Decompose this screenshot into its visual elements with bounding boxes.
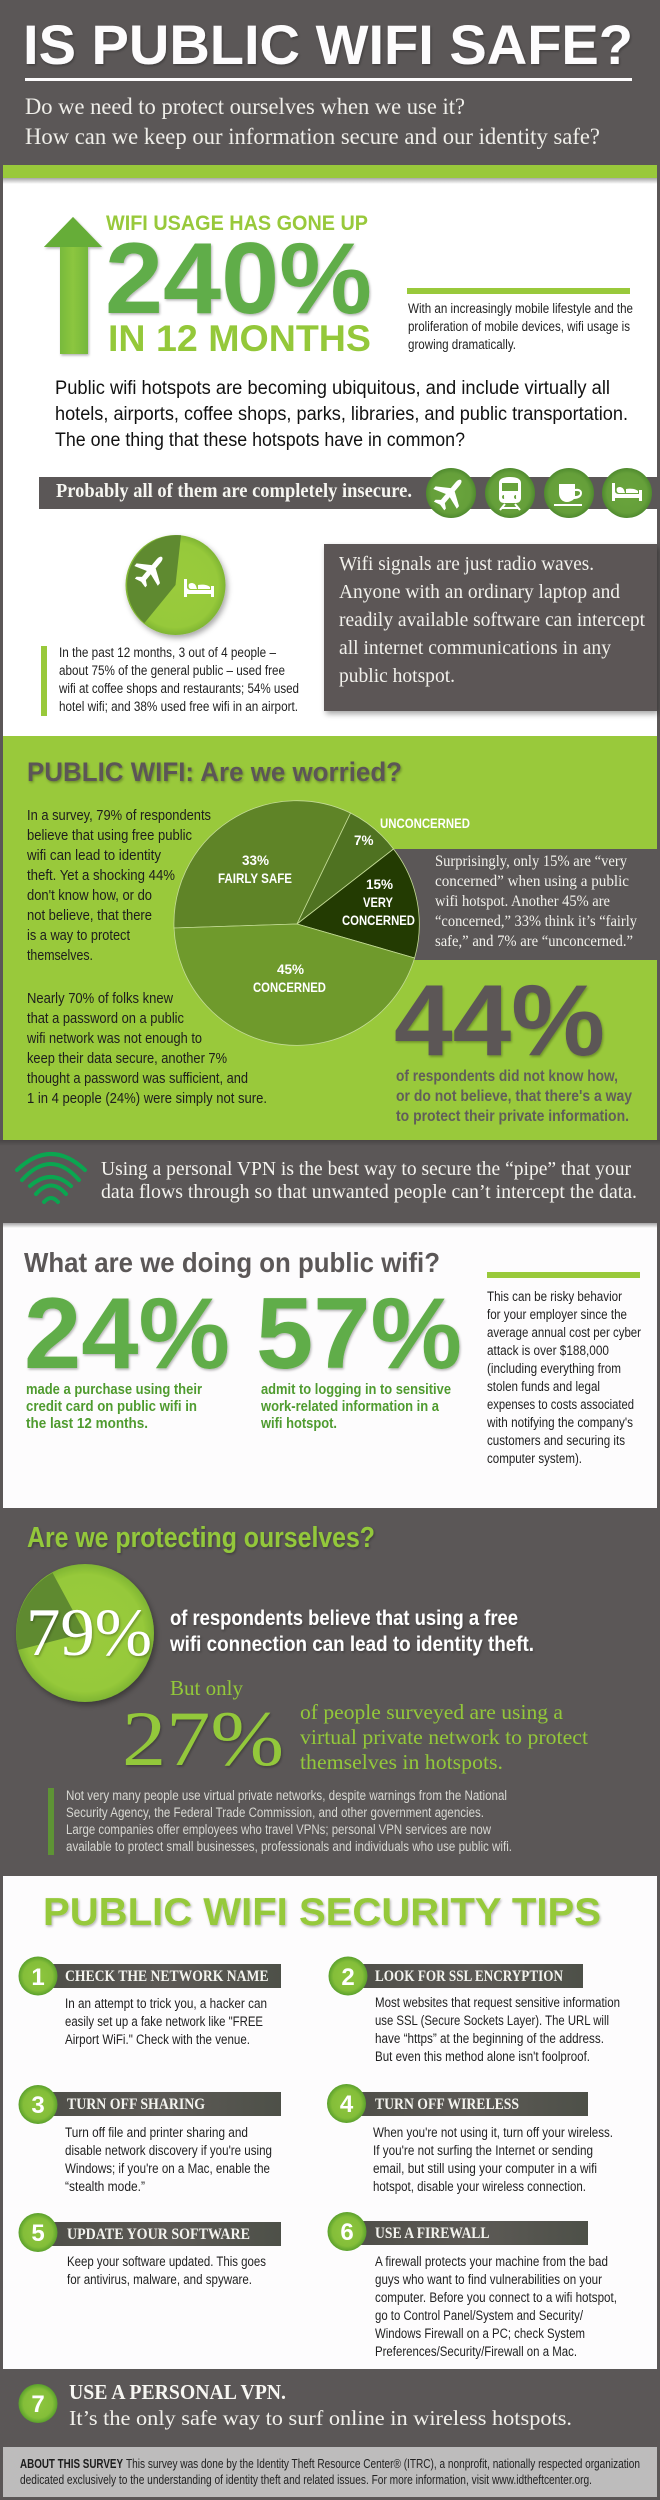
text: password paragraph: Nearly 70% of folks knew: [27, 991, 173, 1007]
text: VPN usage note: [48, 1788, 512, 1855]
tip 4: When you're not using it, turn off your wireless.: [373, 2125, 613, 2140]
text: survey paragraph: don't know how, or do: [27, 888, 152, 904]
callout: concern levels: Surprisingly, only 15% are “very: [435, 853, 627, 870]
stat: 27%: of people surveyed are using a: [300, 1700, 564, 1724]
text: survey paragraph: not believe, that there: [27, 908, 152, 924]
text: risky behavior note: (including everything from: [487, 1361, 621, 1376]
icon: wifi: [17, 1154, 85, 1202]
panel: are we worried: [3, 736, 657, 1140]
icon: bed: [602, 468, 652, 518]
text: risky behavior note: stolen funds and legal: [487, 1379, 600, 1394]
tip 2: Most websites that request sensitive information: [375, 1995, 620, 2010]
label: very concerned: VERY: [363, 895, 393, 910]
label: very concerned: CONCERNED: [342, 913, 415, 928]
text: risky behavior note: expenses to costs associated: [487, 1397, 634, 1412]
tip 3: 3: [31, 2092, 45, 2119]
text: password paragraph: [26, 991, 267, 1107]
tip 2: LOOK FOR SSL ENCRYPTION: [375, 1968, 563, 1985]
text: usage stats: about 75% of the general public – used free: [59, 663, 285, 678]
text: growth note: [407, 288, 633, 352]
callout: concern levels: concerned” when using a public: [435, 873, 629, 890]
text: identity theft belief: [169, 1606, 534, 1656]
text: risky behavior note: This can be risky behavior: [487, 1289, 622, 1304]
text: growth note: growing dramatically.: [408, 337, 516, 352]
tip 2: use SSL (Secure Sockets Layer). The URL will: [375, 2013, 609, 2028]
tip 2: 2: [341, 1964, 355, 1991]
tip 3: Turn off file and printer sharing and: [65, 2125, 248, 2140]
callout: concern levels: “concerned,” 33% think it’s “fairly: [435, 913, 637, 930]
text: use a personal VPN: USE A PERSONAL VPN.: [69, 2380, 286, 2404]
text: hotspots paragraph: hotels, airports, coffee shops, parks, libraries, and public transportation.: [55, 404, 628, 425]
callout: radio waves: public hotspot.: [339, 665, 455, 687]
heading: PUBLIC WIFI: Are we worried?: [27, 757, 402, 787]
tip 4: If you're not surfing the Internet or sending: [373, 2143, 593, 2158]
text: use a personal VPN: [69, 2380, 572, 2430]
tip 6: go to Control Panel/System and Security/: [375, 2308, 583, 2323]
text: risky behavior note: computer system).: [487, 1451, 582, 1466]
tip 4: hotspot, disable your wireless connection.: [373, 2179, 586, 2194]
text: survey paragraph: is a way to protect: [27, 928, 130, 944]
text: VPN usage note: available to protect small businesses, professionals and individuals who use public wifi.: [66, 1839, 512, 1854]
text: usage stats: wifi at coffee shops and restaurants; 54% used: [58, 681, 299, 696]
text: VPN message: [101, 1159, 637, 1203]
tip 5: Keep your software updated. This goes: [67, 2254, 266, 2269]
text: password paragraph: wifi network was not enough to: [26, 1031, 202, 1047]
banner: insecure: [39, 468, 657, 518]
tip 6: Windows Firewall on a PC; check System: [375, 2326, 585, 2341]
tip 5: for antivirus, malware, and spyware.: [67, 2272, 252, 2287]
text: usage stats: hotel wifi; and 38% used free wifi in an airport.: [59, 699, 298, 714]
tip 3: TURN OFF SHARING: [67, 2096, 205, 2113]
text: identity theft belief: wifi connection can lead to identity theft.: [169, 1632, 534, 1656]
heading: PUBLIC WIFI SECURITY TIPS: [43, 1891, 601, 1934]
badge 7: [18, 2384, 58, 2423]
label: concerned: 45%: [277, 962, 304, 977]
callout: radio waves: Wifi signals are just radio waves.: [339, 553, 594, 575]
stat: 27%: [122, 1676, 588, 1782]
text: survey paragraph: believe that using free public: [27, 828, 192, 844]
text: VPN usage note: Security Agency, the Federal Trade Commission, and other government agencies.: [66, 1805, 484, 1820]
text: password paragraph: thought a password was sufficient, and: [27, 1071, 248, 1087]
stat: 24%: credit card on public wifi in: [26, 1398, 197, 1415]
text: usage stats: In the past 12 months, 3 out of 4 people –: [59, 645, 276, 660]
tip 3: [18, 2085, 281, 2194]
tip 6: computer. Before you connect to a wifi hotspot,: [375, 2290, 617, 2305]
stat: 44%: 44%: [394, 965, 605, 1077]
footer: about this survey: ABOUT THIS SURVEY: [20, 2457, 124, 2471]
panel: tip 7 personal VPN: [18, 2380, 572, 2430]
text: risky behavior note: [486, 1272, 641, 1466]
heading: What are we doing on public wifi?: [24, 1247, 440, 1278]
label: very concerned: [342, 877, 415, 928]
tip 5: 5: [31, 2220, 45, 2247]
callout: radio waves: all internet communications in any: [339, 637, 611, 659]
label: unconcerned: [354, 816, 470, 848]
stat: 27%: But only: [170, 1676, 243, 1700]
tip 3: “stealth mode.”: [65, 2179, 145, 2194]
tip 6: Preferences/Security/Firewall on a Mac.: [375, 2344, 577, 2359]
title: IS PUBLIC WIFI SAFE?: [23, 13, 633, 76]
pie chart: concern: [174, 801, 470, 1045]
label: unconcerned: UNCONCERNED: [380, 816, 470, 831]
tip 2: But even this method alone isn't foolproof.: [375, 2049, 590, 2064]
label: fairly safe: FAIRLY SAFE: [218, 871, 292, 886]
text: risky behavior note: attack is over $188,000: [487, 1343, 609, 1358]
stat: 57%: 57%: [256, 1278, 462, 1390]
label: unconcerned: 7%: [354, 833, 374, 848]
stat: 57%: admit to logging in to sensitive: [261, 1381, 451, 1398]
stat: wifi usage 240%: WIFI USAGE HAS GONE UP: [106, 212, 368, 235]
pie: 79%: 79%: [26, 1594, 152, 1670]
stat: 44%: [394, 965, 632, 1125]
tip 2: [328, 1956, 620, 2064]
badge 7: 7: [31, 2391, 45, 2418]
label: very concerned: 15%: [366, 877, 393, 892]
banner: insecure: Probably all of them are completely insecure.: [56, 480, 412, 502]
stat: 24%: made a purchase using their: [26, 1381, 202, 1398]
text: VPN usage note: Large companies offer employees who travel VPNs; personal VPN services are now: [66, 1822, 491, 1837]
tip 4: TURN OFF WIRELESS: [375, 2096, 519, 2113]
text: risky behavior note: customers and securing its: [487, 1433, 625, 1448]
text: password paragraph: that a password on a public: [27, 1011, 184, 1027]
callout: concern levels: wifi hotspot. Another 45% are: [435, 893, 610, 910]
stat: 27%: 27%: [122, 1695, 284, 1782]
panel: are we protecting ourselves: [16, 1522, 588, 1855]
text: risky behavior note: for your employer since the: [487, 1307, 627, 1322]
callout: concern levels: safe,” and 7% are “unconcerned.”: [435, 933, 633, 950]
text: password paragraph: keep their data secure, another 7%: [27, 1051, 227, 1067]
heading: Are we protecting ourselves?: [27, 1522, 375, 1554]
text: VPN message: data flows through so that unwanted people can’t intercept the data.: [101, 1182, 637, 1203]
text: survey paragraph: themselves.: [27, 948, 93, 964]
callout: concern levels: [393, 849, 657, 960]
tip 4: [327, 2084, 613, 2194]
text: survey paragraph: wifi can lead to identity: [26, 848, 162, 864]
tip 2: have “https” at the beginning of the address.: [375, 2031, 604, 2046]
label: concerned: [253, 962, 326, 995]
callout: radio waves: [324, 544, 657, 711]
tip 1: Airport WiFi." Check with the venue.: [65, 2032, 250, 2047]
header: [23, 13, 633, 149]
stat: wifi usage 240%: IN 12 MONTHS: [108, 318, 371, 359]
callout: radio waves: Anyone with an ordinary laptop and: [339, 581, 620, 603]
panel: usage intro: [3, 165, 657, 736]
text: survey paragraph: theft. Yet a shocking 44%: [27, 868, 175, 884]
panel: VPN banner: [0, 1140, 660, 1203]
text: VPN usage note: Not very many people use virtual private networks, despite warnings from the National: [66, 1788, 507, 1803]
tip 1: 1: [31, 1964, 45, 1991]
text: risky behavior note: with notifying the company's: [486, 1415, 633, 1430]
tip 4: email, but still using your computer in a wifi: [373, 2161, 597, 2176]
tip 6: USE A FIREWALL: [375, 2225, 490, 2242]
stat: wifi usage 240%: 240%: [105, 223, 372, 335]
pie: plane vs hotel usage: [126, 535, 226, 635]
stat: 44%: of respondents did not know how,: [396, 1068, 618, 1085]
callout: radio waves: readily available software can intercept: [339, 609, 645, 631]
tip 3: Windows; if you're on a Mac, enable the: [65, 2161, 270, 2176]
label: fairly safe: 33%: [242, 853, 269, 868]
tip 6: A firewall protects your machine from the bad: [375, 2254, 608, 2269]
pie: 79%: [16, 1564, 154, 1702]
stat: 27%: virtual private network to protect: [300, 1725, 588, 1749]
text: hotspots paragraph: [55, 378, 628, 451]
stat: 57%: wifi hotspot.: [260, 1415, 337, 1432]
panel: security tips: [3, 1876, 657, 2369]
text: hotspots paragraph: Public wifi hotspots are becoming ubiquitous, and include virtually all: [55, 378, 610, 399]
icon: train: [485, 468, 535, 518]
tip 6: guys who want to find vulnerabilities on your: [375, 2272, 602, 2287]
icon: coffee cup: [544, 468, 594, 518]
label: concerned: CONCERNED: [253, 980, 326, 995]
tip 5: UPDATE YOUR SOFTWARE: [67, 2226, 250, 2243]
tip 1: CHECK THE NETWORK NAME: [65, 1968, 268, 1985]
icon: plane: [128, 547, 174, 593]
stat: 24%: 24%: [24, 1278, 230, 1390]
stat: 44%: to protect their private information.: [396, 1108, 629, 1125]
tip 5: [18, 2213, 281, 2287]
text: survey paragraph: In a survey, 79% of respondents: [27, 808, 211, 824]
text: growth note: proliferation of mobile devices, wifi usage is: [408, 319, 630, 334]
tip 3: disable network discovery if you're using: [65, 2143, 272, 2158]
icon: bed: [184, 579, 214, 597]
label: fairly safe: [218, 853, 292, 886]
stat: 27%: themselves in hotspots.: [300, 1750, 503, 1774]
subtitle: Do we need to protect ourselves when we use it?: [25, 94, 465, 119]
tip 1: [18, 1956, 281, 2047]
text: password paragraph: 1 in 4 people (24%) were simply not sure.: [27, 1091, 267, 1107]
stat: 24%: the last 12 months.: [26, 1415, 148, 1432]
tip 1: easily set up a fake network like "FREE: [65, 2014, 263, 2029]
stat: 57%: work-related information in a: [260, 1398, 440, 1415]
subtitle: [25, 94, 600, 149]
text: VPN message: Using a personal VPN is the best way to secure the “pipe” that your: [101, 1159, 632, 1180]
footer: about this survey: [3, 2447, 657, 2497]
icon: up arrow: [44, 217, 102, 354]
text: hotspots paragraph: The one thing that these hotspots have in common?: [55, 430, 465, 451]
text: identity theft belief: of respondents believe that using a free: [170, 1606, 518, 1630]
tip 1: In an attempt to trick you, a hacker can: [65, 1996, 267, 2011]
tip 6: 6: [340, 2219, 354, 2246]
text: use a personal VPN: It’s the only safe way to surf online in wireless hotspots.: [69, 2406, 572, 2430]
panel: what are we doing: [3, 1223, 657, 1508]
text: survey paragraph: [26, 808, 211, 964]
text: usage stats: [41, 645, 299, 716]
stat: 44%: or do not believe, that there's a way: [396, 1088, 632, 1105]
icon: plane: [426, 468, 476, 518]
subtitle: How can we keep our information secure and our identity safe?: [25, 124, 600, 149]
tip 6: [328, 2212, 617, 2359]
tip 4: 4: [340, 2091, 354, 2118]
